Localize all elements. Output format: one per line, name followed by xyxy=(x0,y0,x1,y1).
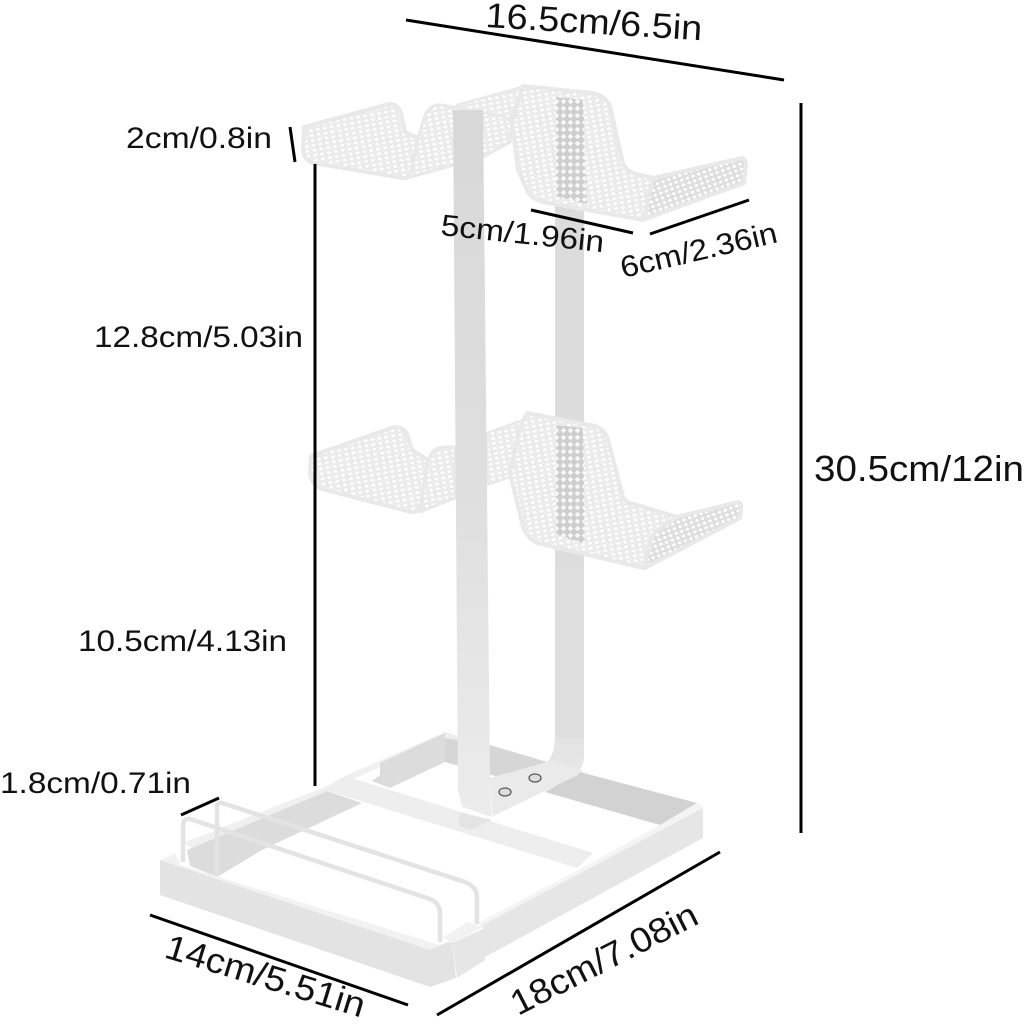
back post xyxy=(490,205,584,816)
back rail inner face behind posts xyxy=(445,738,547,780)
rack base xyxy=(160,205,703,987)
tray right section xyxy=(510,413,677,568)
tray rear section xyxy=(487,420,523,485)
bolt xyxy=(529,774,541,782)
label: base length: 18cm/7.08in xyxy=(504,895,704,1023)
label: overall height: 30.5cm/12in xyxy=(814,448,1024,489)
tray rear section xyxy=(457,87,523,157)
right rail face xyxy=(483,808,703,957)
tray right lip xyxy=(645,502,741,568)
label: tray lip height: 2cm/0.8in xyxy=(126,122,272,155)
tray right section xyxy=(512,86,653,220)
tray center arch xyxy=(407,105,512,178)
label: lower spacing: 10.5cm/4.13in xyxy=(78,625,287,658)
dimension lines xyxy=(150,20,801,1015)
back rail top xyxy=(445,732,703,811)
back post lower section xyxy=(555,568,584,738)
bracket plate xyxy=(490,760,582,816)
top mesh tray xyxy=(303,86,746,220)
front post xyxy=(453,110,492,817)
wire guard xyxy=(183,803,477,942)
tray mesh band xyxy=(556,425,585,544)
tray left section xyxy=(303,104,418,178)
label: tray depth: 5cm/1.96in xyxy=(439,209,606,259)
post foot reflection xyxy=(458,812,492,830)
bolt xyxy=(499,788,511,796)
label: guard height: 1.8cm/0.71in xyxy=(0,767,191,800)
tray left section xyxy=(310,427,428,512)
label: tray width: 6cm/2.36in xyxy=(617,217,780,285)
left rail inner face xyxy=(187,791,362,877)
tray right lip xyxy=(645,158,746,219)
crossbar xyxy=(325,776,593,868)
back post between trays xyxy=(555,200,584,440)
label: base width: 14cm/5.51in xyxy=(161,927,370,1024)
left rail top xyxy=(183,732,445,848)
front rail face xyxy=(160,860,456,987)
front rail top edge xyxy=(160,853,448,950)
tray mesh band xyxy=(556,97,587,204)
tray center arch xyxy=(420,447,455,512)
label: upper spacing: 12.8cm/5.03in xyxy=(94,321,303,354)
back rail inner face right xyxy=(545,772,697,825)
right rail top xyxy=(478,803,703,928)
back corner inner face xyxy=(372,733,445,788)
middle mesh tray xyxy=(310,413,741,568)
corner clip xyxy=(443,922,485,978)
